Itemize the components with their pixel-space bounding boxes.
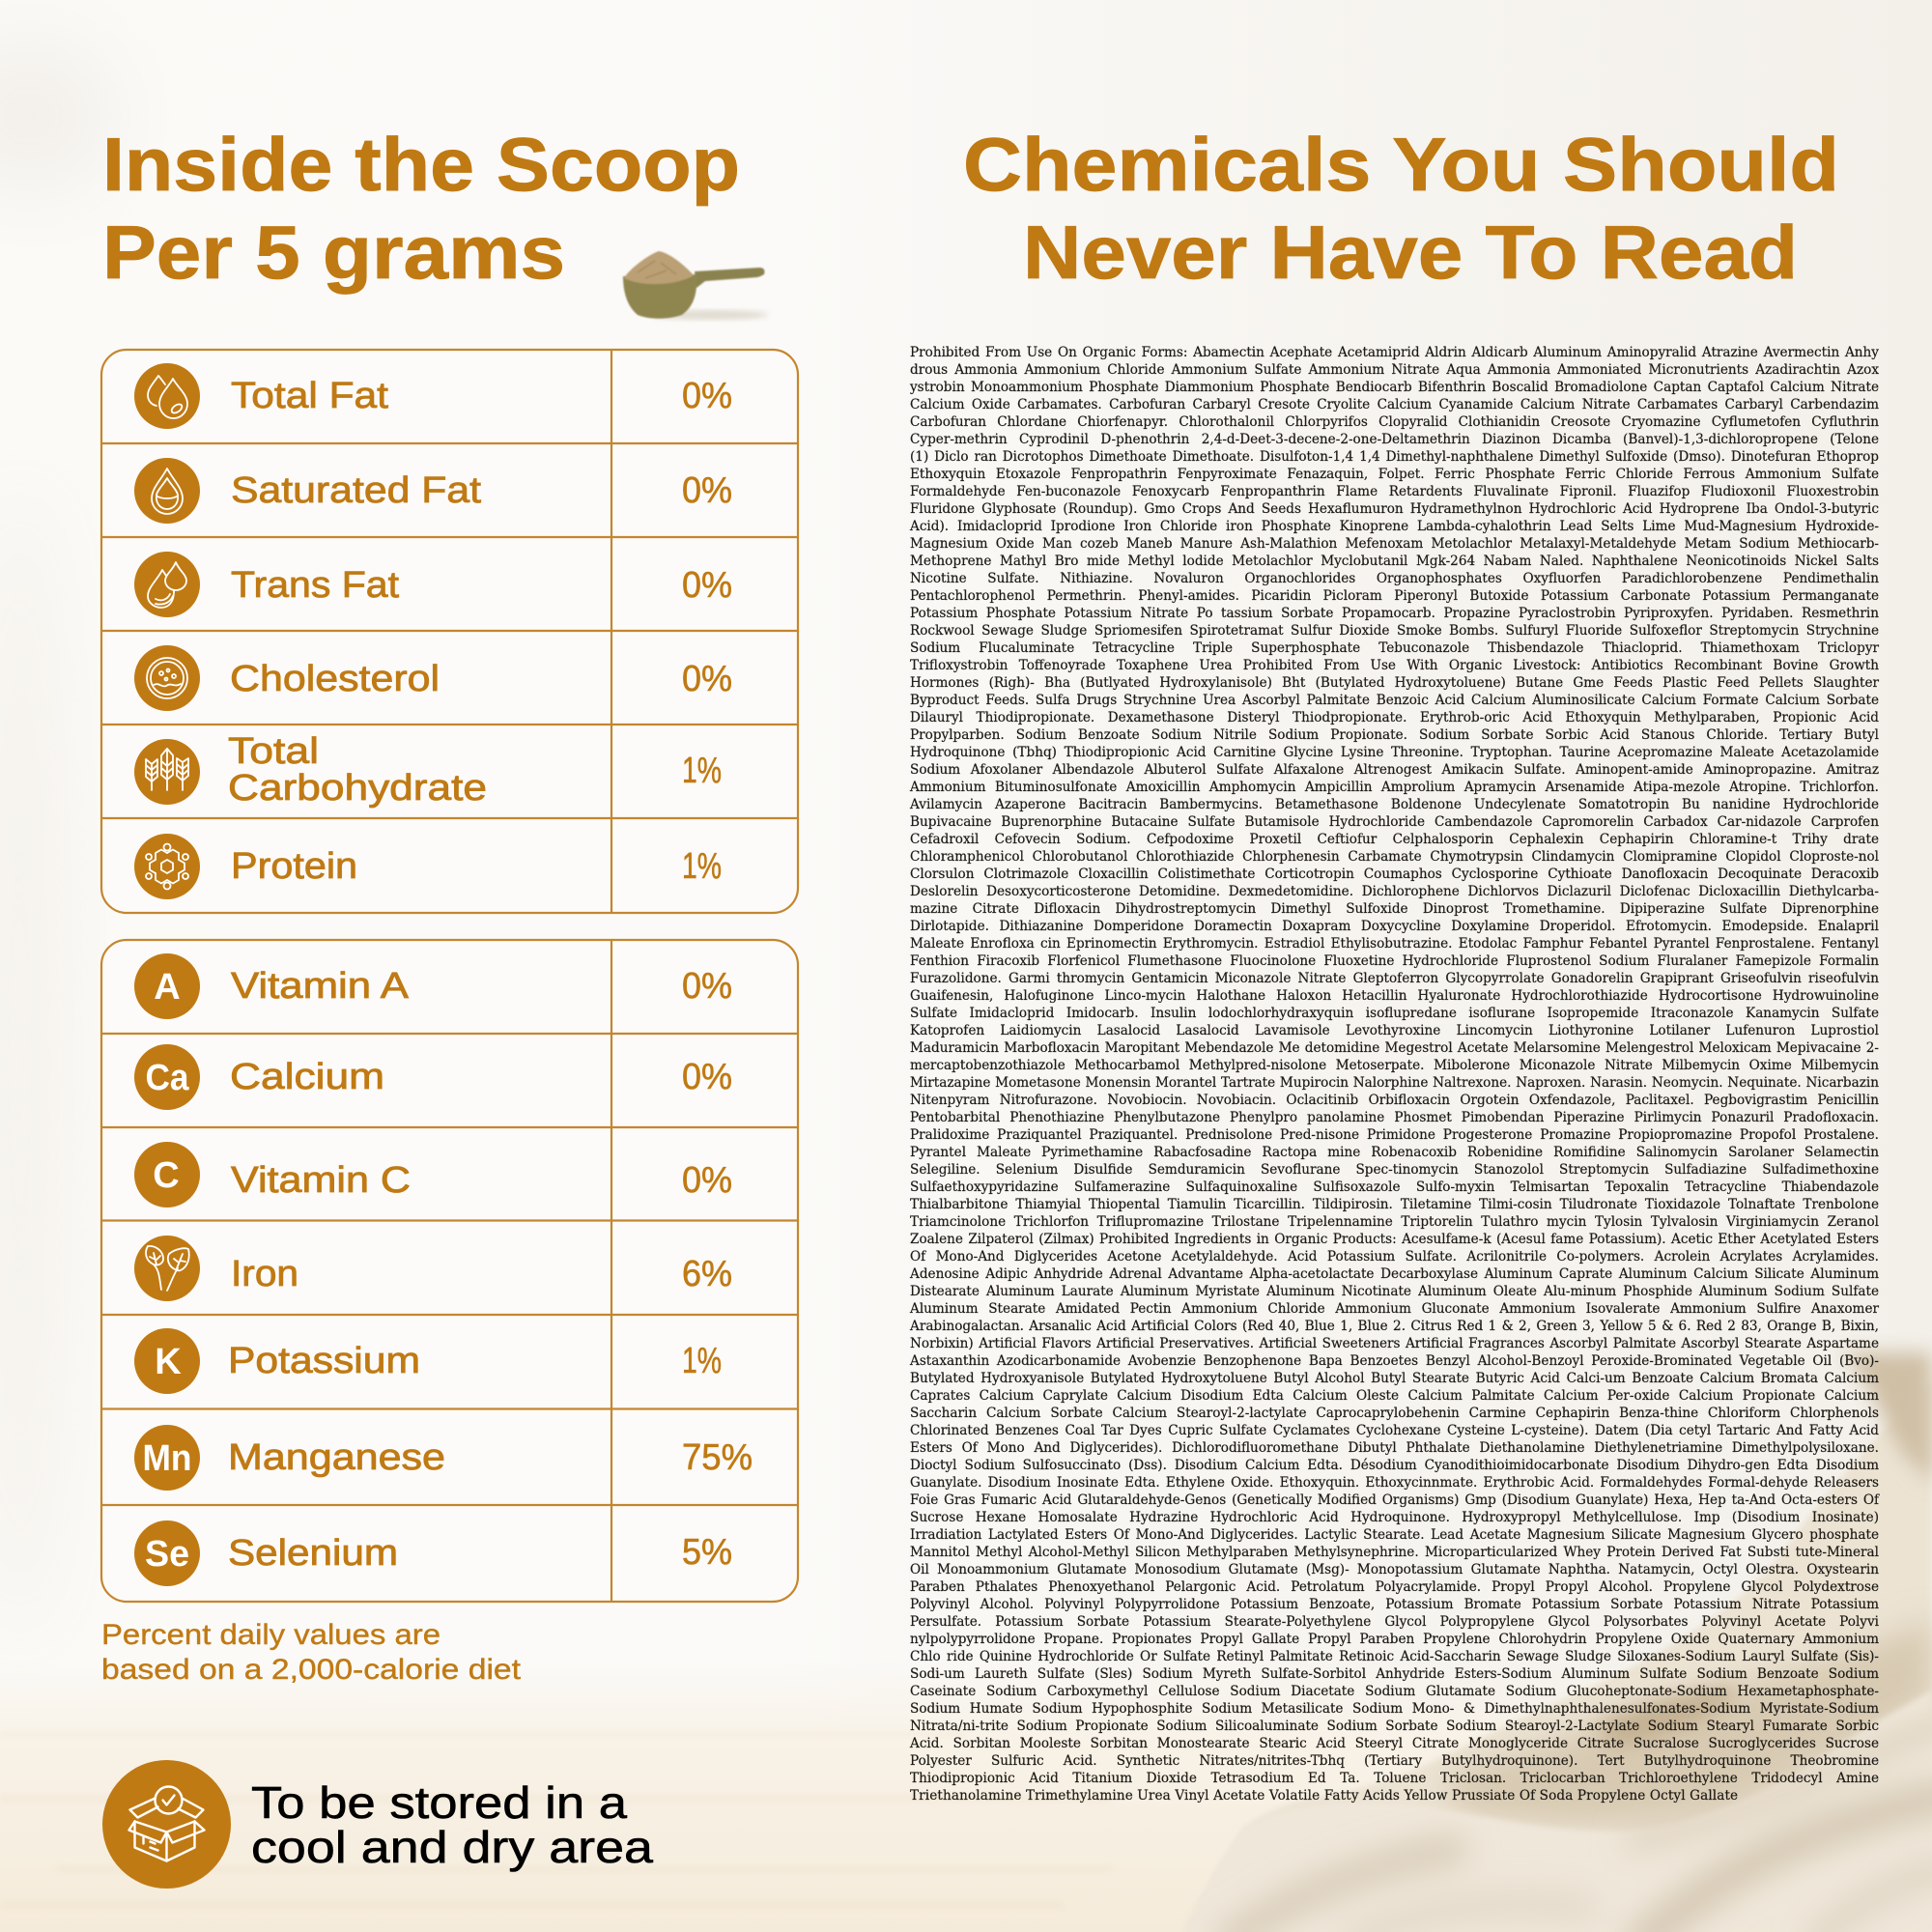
row: Saturated Fat: 0% (682, 470, 732, 511)
text block: prohibited chemicals list: Caseinate Sodium Carboxymethyl Cellulose Sodium Diacetate Sodium Glutamate Sodium Glucoheptonate-Sodium Hexametaphosphate- (910, 1684, 1879, 1699)
text block: prohibited chemicals list: Guaifenesin, Halofuginone Linco-mycin Halothane Haloxon Hetacillin Hyaluronate Hydrochlorothiazide Hydrocortisone Hydrowuinoline (910, 988, 1879, 1004)
heading: Inside the Scoop: Per 5 grams (102, 210, 565, 295)
text block: prohibited chemicals list: Maleate Enrofloxa cin Eprinomectin Erythromycin. Estradiol Ethylisobutrazine. Etodolac Famphur Febantel Pyrantel Fenprostalene. Fentanyl (910, 936, 1879, 952)
text block: prohibited chemicals list: Mirtazapine Mometasone Monensin Morantel Tartrate Mupirocin Nalorphine Naltrexone. Naproxen. Narasin. Neomycin. Nequinate. Nicarbazin (910, 1075, 1879, 1091)
text block: prohibited chemicals list: Formaldehyde Fen-buconazole Fenoxycarb Fenpropanthrin Flame Retardents Fluvalinate Fipronil. Fluazifop Fludioxonil Fluoxestrobin (910, 484, 1879, 499)
row: Potassium: K (155, 1342, 182, 1382)
row: Total Fat: 0% (682, 376, 732, 416)
text block: prohibited chemicals list: mercaptobenzothiazole Methocarbamol Methylpred-nisolone Metoserpate. Mibolerone Miconazole Nitrate Milbemycin Oxime Milbemycin (910, 1058, 1879, 1073)
row: Calcium: Calcium (230, 1057, 384, 1097)
panel: vitamins and minerals table (101, 940, 798, 1602)
text block: prohibited chemicals list: Hormones (Righ)- Bha (Butlyated Hydroxylanisole) Bht (Butylated Hydroxytoluene) Butane Gme Feeds Plastic Feed Pellets Slaughter (910, 675, 1879, 691)
row: Potassium: Potassium (228, 1341, 420, 1381)
text block: prohibited chemicals list: Deslorelin Desoxycorticosterone Detomidine. Dexmedetomidine. Dichlorophene Dichlorvos Diclazuril Diclofenac Dicloxacillin Diethylcarba- (910, 884, 1879, 899)
text block: prohibited chemicals list: Chlorinated Benzenes Coal Tar Dyes Cupric Sulfate Cyclamates Cyclohexane Cysteine L-cysteine). Datem (Dia cetyl Tartaric And Fatty Acid (910, 1423, 1879, 1438)
row: Total Fat: Total Fat (231, 376, 388, 416)
text block: prohibited chemicals list: Caprates Calcium Caprylate Calcium Disodium Edta Calcium Oleste Calcium Palmitate Calcium Per-oxide Calcium Propionate Calcium (910, 1388, 1879, 1404)
text block: prohibited chemicals list: Saccharin Calcium Sorbate Calcium Stearoyl-2-lactylate Caprocaprylobehenin Carmine Cephapirin Benza-thine Chloriform Chlorphenols (910, 1406, 1879, 1421)
text block: prohibited chemicals list: nylpolypyrrolidone Propane. Propionates Propyl Gallate Propyl Paraben Propylene Chlorohydrin Propylene Oxide Quaternary Ammonium (910, 1632, 1879, 1647)
text block: prohibited chemicals list: Fenthion Firacoxib Florfenicol Flumethasone Fluocinolone Fluoxetine Hydrochloride Fluprostenol Sodium Fluralaner Famepizole Formalin (910, 953, 1879, 969)
text block: prohibited chemicals list: Ethoxyquin Etoxazole Fenpropathrin Fenpyroximate Fenazaquin, Folpet. Ferric Phosphate Ferric Chloride Ferrous Ammonium Sulfate (910, 467, 1879, 482)
text block: prohibited chemicals list: Byproduct Feeds. Sulfa Drugs Strychnine Urea Ascorbyl Palmitate Benzoic Acid Calcium Aluminosilicate Calcium Formate Calcium Sorbate (910, 693, 1879, 708)
text block: prohibited chemicals list: Rockwool Sewage Sludge Spriomesifen Spirotetramat Sulfur Dioxide Smoke Bombs. Sulfuryl Fluoride Sulfoxeflor Streptomycin Strychnine (910, 623, 1879, 639)
text block: prohibited chemicals list: Butylated Hydroxyanisole Butylated Hydroxytoluene Butyl Alcohol Butyl Stearate Butyric Acid Calci-um Benzoate Calcium Bromata Calcium (910, 1371, 1879, 1386)
text block: prohibited chemicals list: Sodium Afoxolaner Albendazole Albuterol Sulfate Alfaxalone Altrenogest Amikacin Sulfate. Aminopent-amide Aminopropazine. Amitraz (910, 762, 1879, 778)
heading: Chemicals You Should Never Have To Read (963, 122, 1839, 295)
blanket: lobe, folds and lower hump (1183, 1352, 1932, 1932)
row: Protein (134, 834, 722, 899)
row: Vitamin A: A (154, 967, 181, 1008)
text block: prohibited chemicals list: Selegiline. Selenium Disulfide Semduramicin Sevoflurane Spec-tinomycin Stanozolol Streptomycin Sulfadiazine Sulfadimethoxine (910, 1162, 1879, 1178)
row: Manganese: 75% (682, 1437, 753, 1478)
row: Iron: 6% (682, 1254, 732, 1294)
text block: prohibited chemicals list: Irradiation Lactylated Esters Of Mono-And Diglycerides. Lactylic Stearate. Lead Acetate Magnesium Silicate Magnesium Glycero phosphate (910, 1527, 1879, 1543)
text block: prohibited chemicals list: Sucrose Hexane Homosalate Hydrazine Hydrochloric Acid Hydroquinone. Hydroxypropyl Methylcellulose. Imp (Disodium Inosinate) (910, 1510, 1879, 1525)
row: Calcium: Ca (145, 1058, 189, 1098)
panel: macronutrient table (101, 350, 798, 913)
row: Saturated Fat (134, 458, 732, 524)
text block: prohibited chemicals list: Nicotine Sulfate. Nithiazine. Novaluron Organochlorides Organophosphates Oxyfluorfen Paradichlorobenzene Pendimethalin (910, 571, 1879, 586)
text block: prohibited chemicals list: Nitrata/ni-trite Sodium Propionate Sodium Silicoaluminate Sodium Sorbate Sodium Stearoyl-2-Lactylate Sodium Stearyl Fumarate Sorbic (910, 1719, 1879, 1734)
heading: Inside the Scoop (102, 122, 740, 295)
text block: prohibited chemicals list: drous Ammonia Ammonium Chloride Ammonium Sulfate Ammonium Nitrate Aqua Ammonia Ammoniated Micronutrients Azadirachtin Azox (910, 362, 1879, 378)
row: Vitamin C (134, 1142, 732, 1208)
text block: prohibited chemicals list: Maduramicin Marbofloxacin Maropitant Mebendazole Me detomidine Megestrol Acetate Melarsomine Melengestrol Meloxicam Mepivacaine 2- (910, 1040, 1879, 1056)
text: storage instruction: To be stored in a (251, 1777, 627, 1828)
text block: prohibited chemicals list: Furazolidone. Garmi thromycin Gentamicin Miconazole Nitrate Gleptoferron Glycopyrrolate Gonadorelin Grapiprant Griseofulvin riseofulvin (910, 971, 1879, 986)
text block: prohibited chemicals list: Acid). Imidacloprid Iprodione Iron Chloride iron Phosphate Kinoprene Lambda-cyhalothrin Lead Selts Lime Mud-Magnesium Hydroxide- (910, 519, 1879, 534)
row: Total Carbohydrate: 1% (682, 751, 722, 791)
text block: prohibited chemicals list: Propylparben. Sodium Benzoate Sodium Nitrile Sodium Propionate. Sodium Sorbate Sorbic Acid Stanous Chloride. Tertiary Butyl (910, 727, 1879, 743)
row: Calcium: 0% (682, 1057, 732, 1097)
row: Protein: Protein (231, 846, 357, 887)
text block: prohibited chemicals list: Zoalene Zilpaterol (Zilmax) Prohibited Ingredients in Organic Products: Acesulfame-k (Acesul fame Potassium). Acetic Ether Acetylated Esters (910, 1232, 1879, 1247)
text block: prohibited chemicals list: Oil Monoammonium Glutamate Monosodium Glutamate (Msg)- Monopotassium Glutamate Naphtha. Natamycin, Octyl Olestra. Oxystearin (910, 1562, 1879, 1577)
text block: prohibited chemicals list: Bupivacaine Buprenorphine Butacaine Sulfate Butamisole Hydrochloride Cambendazole Capromorelin Carbadox Car-nidazole Carprofen (910, 814, 1879, 830)
text block: prohibited chemicals list: Paraben Pthalates Phenoxyethanol Pelargonic Acid. Petrolatum Polyacrylamide. Propyl Propyl Alcohol. Propylene Glycol Polydextrose (910, 1579, 1879, 1595)
text block: prohibited chemicals list: Trifloxystrobin Toffenoyrade Toxaphene Urea Prohibited From Use With Organic Livestock: Antibiotics Recombinant Bovine Growth (910, 658, 1879, 673)
text block: prohibited chemicals list: Triamcinolone Trichlorfon Triflupromazine Trilostane Tripelennamine Triptorelin Tulathro mycin Tylosin Tylvalosin Virginiamycin Zeranol (910, 1214, 1879, 1230)
heading: Chemicals You Should Never Have To Read: Chemicals You Should (963, 122, 1839, 207)
text block: prohibited chemicals list: Guanylate. Disodium Inosinate Edta. Ethylene Oxide. Ethoxyquin. Ethoxycinnmate. Erythrobic Acid. Formaldehydes Formal-dehyde Releasers (910, 1475, 1879, 1491)
footnote: percent daily values: Percent daily values are (101, 1619, 440, 1651)
text block: prohibited chemicals list (910, 345, 1880, 1804)
row: Manganese (134, 1425, 753, 1491)
text block: prohibited chemicals list: Triethanolamine Trimethylamine Urea Vinyl Acetate Volatile Fatty Acids Yellow Prussiate Of Soda Propylene Octyl Gallate (910, 1788, 1738, 1804)
text block: prohibited chemicals list: Sulfate Imidacloprid Imidocarb. Insulin lodochlorhydraxyquin isoflupredane isoflurane Isopropemide Itraconazole Kanamycin Sulfate (910, 1006, 1879, 1021)
text: storage instruction: cool and dry area (251, 1822, 653, 1872)
row: Selenium (134, 1520, 732, 1586)
row: Manganese: Mn (143, 1438, 191, 1479)
text block: prohibited chemicals list: Cyper-methrin Cyprodinil D-phenothrin 2,4-d-Deet-3-decene-2-one-Deltamethrin Diazinon Dicamba (Banvel)-1,3-dichloropropene (Telone (910, 432, 1879, 447)
text block: prohibited chemicals list: Ammonium Bituminosulfonate Amoxicillin Amphomycin Ampicillin Amprolium Apramycin Arsenamide Atipa-mezole Atropine. Trichlorfon. (910, 780, 1879, 795)
row: Manganese: Manganese (228, 1437, 445, 1478)
text block: prohibited chemicals list: Cefadroxil Cefovecin Sodium. Cefpodoxime Proxetil Ceftiofur Celphalosporin Cephalexin Cephapirin Chloramine-t Trihy drate (910, 832, 1879, 847)
row: Trans Fat: 0% (682, 565, 732, 606)
text block: prohibited chemicals list: Sulfaethoxypyridazine Sulfamerazine Sulfaquinoxaline Sulfisoxazole Sulfo-myxin Telmisartan Tepoxalin Tetracycline Thiabendazole (910, 1179, 1879, 1195)
text block: prohibited chemicals list: Calcium Oxide Carbamates. Carbofuran Carbaryl Cresote Cryolite Calcium Cyanamide Calcium Nitrate Carbamates Carbaryl Carbendazim (910, 397, 1879, 412)
text block: prohibited chemicals list: Dirlotapide. Dithiazanine Domperidone Doramectin Doxapram Doxycycline Doxylamine Droperidol. Efrotomycin. Emodepside. Enalapril (910, 919, 1879, 934)
text block: prohibited chemicals list: Chloramphenicol Chlorobutanol Chlorothiazide Chlorphenesin Carbamate Chymotrypsin Clindamycin Clomipramine Clopidol Cloproste-nol (910, 849, 1879, 865)
text block: prohibited chemicals list: Clorsulon Clotrimazole Cloxacillin Colistimethate Corticotropin Coumaphos Cyclosporine Cythioate Danofloxacin Decoquinate Deracoxib (910, 867, 1879, 882)
text block: prohibited chemicals list: Thiodipropionic Acid Titanium Dioxide Tetrasodium Ed Ta. Toluene Triclosan. Triclocarban Trichloroethylene Tridodecyl Amine (910, 1771, 1879, 1786)
text block: prohibited chemicals list: Sodi-um Laureth Sulfate (Sles) Sodium Myreth Sulfate-Sorbitol Anhydride Esters-Sodium Aluminum Sulfate Sodium Benzoate Sodium (910, 1666, 1879, 1682)
row: Vitamin A: 0% (682, 966, 732, 1007)
text block: prohibited chemicals list: Katoprofen Laidiomycin Lasalocid Lasalocid Lavamisole Levothyroxine Lincomycin Liothyronine Lotilaner Lufenuron Luprostiol (910, 1023, 1879, 1038)
text block: prohibited chemicals list: Foie Gras Fumaric Acid Glutaraldehyde-Genos (Genetically Modified Organisms) Gmp (Disodium Guanylate) Hexa, Hep ta-And Octa-esters Of (910, 1492, 1879, 1508)
row: Vitamin C: 0% (682, 1160, 732, 1201)
text block: prohibited chemicals list: Polyester Sulfuric Acid. Synthetic Nitrates/nitrites-Tbhq (Tertiary Butylhydroquinone). Tert Butylhydroquinone Theobromine (910, 1753, 1879, 1769)
text block: prohibited chemicals list: Dioctyl Sodium Sulfosuccinato (Dss). Disodium Calcium Edta. Désodium Cyanodithioimidocarbonate Disodium Dihydro-gen Edta Disodium (910, 1458, 1879, 1473)
text block: prohibited chemicals list: Arabinogalactan. Arsanalic Acid Artificial Colors (Red 40, Blue 1, Blue 2. Citrus Red 1 & 2, Green 3, Yellow 5 & 6. Red 2 83, Orange B, Bixin, (910, 1319, 1879, 1334)
text block: prohibited chemicals list: Polyvinyl Alcohol. Polyvinyl Polypyrrolidone Potassium Benzoate, Potassium Bromate Potassium Sorbate Potassium Nitrate Potassium (910, 1597, 1879, 1612)
row: Total Carbohydrate: Carbohydrate (228, 768, 487, 809)
row: Total Carbohydrate (134, 731, 722, 809)
row: Saturated Fat: Saturated Fat (231, 470, 481, 511)
text block: prohibited chemicals list: Magnesium Oxide Man cozeb Maneb Manure Ash-Malathion Mefenoxam Metolachlor Metalaxyl-Metaldehyde Metam Sodium Methiocarb- (910, 536, 1879, 552)
row: Cholesterol (134, 645, 732, 711)
row: Trans Fat: Trans Fat (231, 565, 399, 606)
row: Iron (134, 1236, 732, 1301)
text block: prohibited chemicals list: Hydroquinone (Tbhq) Thiodipropionic Acid Carnitine Glycine Lysine Threonine. Tryptophan. Taurine Acepromazine Maleate Acetazolamide (910, 745, 1879, 760)
text block: prohibited chemicals list: Fluridone Glyphosate (Roundup). Gmo Crops And Seeds Hexaflumuron Hydramethylnon Hydrochloric Acid Hydroprene Iba Ondol-3-butyric (910, 501, 1879, 517)
text block: prohibited chemicals list: Aluminum Stearate Amidated Pectin Ammonium Chloride Ammonium Gluconate Ammonium Isovalerate Ammonium Sulfire Anaxomer (910, 1301, 1879, 1317)
text block: prohibited chemicals list: Pyrantel Maleate Pyrimethamine Rabacfosadine Ractopa mine Robenacoxib Robenidine Romifidine Salinomycin Sarolaner Selamectin (910, 1145, 1879, 1160)
row: Vitamin A (134, 953, 732, 1019)
text block: prohibited chemicals list: Sodium Flucaluminate Tetracycline Triple Superphosphate Tebuconazole Thisbendazole Thiacloprid. Thiamethoxam Triclopyr (910, 640, 1879, 656)
text block: prohibited chemicals list: Astaxanthin Azodicarbonamide Avobenzie Benzophenone Bapa Benzoetes Benzyl Alcohol-Benzoyl Peroxide-Brominated Vegetable Oil (Bvo)- (910, 1353, 1879, 1369)
text block: prohibited chemicals list: Dilauryl Thiodipropionate. Dexamethasone Disteryl Thiodpropionate. Erythrob-oric Acid Ethoxyquin Methylparaben, Propionic Acid (910, 710, 1879, 725)
text block: prohibited chemicals list: Carbofuran Chlordane Chiorfenapyr. Chlorothalonil Chlorpyrifos Clopyralid Clothianidin Creosote Cryomazine Cyflumetofen Cyfluthrin (910, 414, 1879, 430)
row: Calcium (134, 1044, 732, 1110)
icon: open storage box (102, 1760, 231, 1889)
heading: Chemicals You Should Never Have To Read: Never Have To Read (1023, 210, 1798, 295)
row: Selenium: Selenium (228, 1533, 398, 1574)
text block: prohibited chemicals list: Of Mono-And Diglycerides Acetone Acetylaldehyde. Acid Potassium Sulfate. Acrilonitrile Co-polymers. Acrolein Acrylates Acrylamides. (910, 1249, 1879, 1264)
row: Vitamin C: C (153, 1155, 180, 1196)
text block: prohibited chemicals list: Avilamycin Azaperone Bacitracin Bambermycins. Betamethasone Boldenone Undecylenate Somatotropin Bu nanidine Hydrochloride (910, 797, 1879, 812)
text block: prohibited chemicals list: Sodium Humate Sodium Hypophosphite Sodium Metasilicate Sodium Mono- & Dimethylnaphthalenesulfonates-Sodium Myristate-Sodium (910, 1701, 1879, 1717)
icon: scoop of powder (623, 251, 768, 320)
text block: prohibited chemicals list: Prohibited From Use On Organic Forms: Abamectin Acephate Acetamiprid Aldrin Aldicarb Aluminum Aminopyralid Atrazine Avermectin Anhy (910, 345, 1879, 360)
text block: prohibited chemicals list: Methoprene Mathyl Bro mide Methyl lodide Metolachlor Myclobutanil Mgk-264 Nabam Naled. Naphthalene Neonicotinoids Nickel Salts (910, 554, 1879, 569)
text block: prohibited chemicals list: Mannitol Methyl Alcohol-Methyl Silicon Methylparaben Methylsynephrine. Microparticularized Whey Protein Derived Fat Substi tute-Mineral (910, 1545, 1879, 1560)
text block: prohibited chemicals list: Pentachlorophenol Permethrin. Phenyl-amides. Picaridin Picloram Piperonyl Butoxide Potassium Carbonate Potassium Permanganate (910, 588, 1879, 604)
text block: prohibited chemicals list: (1) Diclo ran Dicrotophos Dimethoate Dimethoate. Disulfoton-1,4 1,4 Dimethyl-naphthalene Dimethyl Sulfoxide (Dmso). Dinotefuran Ethoprop (910, 449, 1879, 465)
row: Cholesterol: 0% (682, 659, 732, 699)
text block: prohibited chemicals list: Thialbarbitone Thiamyial Thiopental Tiamulin Ticarcillin. Tildipirosin. Tiletamine Tilmi-cosin Tiludronate Tioxidazole Tolnaftate Trenbolone (910, 1197, 1879, 1212)
row: Protein: 1% (682, 846, 722, 887)
row: Vitamin A: Vitamin A (231, 966, 410, 1007)
text block: prohibited chemicals list: ystrobin Monoammonium Phosphate Diammonium Phosphate Bendiocarb Bifenthrin Boscalid Bromadiolone Captan Captafol Calcium Nitrate (910, 380, 1879, 395)
text block: prohibited chemicals list: Distearate Aluminum Laurate Aluminum Myristate Aluminum Nicotinate Aluminum Oleate Alu-minum Phosphide Aluminum Sodium Sulfate (910, 1284, 1879, 1299)
row: Selenium: 5% (682, 1532, 732, 1573)
row: Vitamin C: Vitamin C (231, 1160, 411, 1201)
text block: prohibited chemicals list: Acid. Sorbitan Mooleste Sorbitan Monostearate Stearic Acid Steeryl Citrate Monoglyceride Citrate Sucralose Sucroglycerides Sucrose (910, 1736, 1879, 1751)
text block: prohibited chemicals list: Pentobarbital Phenothiazine Phenylbutazone Phenylpro panolamine Phosmet Pimobendan Piperazine Pirlimycin Ponazuril Pradofloxacin. (910, 1110, 1879, 1125)
row: Trans Fat (134, 552, 732, 617)
row: Selenium: Se (145, 1534, 189, 1575)
text block: prohibited chemicals list: Adenosine Adipic Anhydride Adrenal Advantame Alpha-acetolactate Decarboxylase Aluminum Caprate Aluminum Calcium Silicate Aluminum (910, 1266, 1879, 1282)
text block: prohibited chemicals list: Potassium Phosphate Potassium Nitrate Po tassium Sorbate Propamocarb. Propazine Pyraclostrobin Pyriproxyfen. Pyridaben. Resmethrin (910, 606, 1879, 621)
text block: prohibited chemicals list: Pralidoxime Praziquantel Praziquantel. Prednisolone Pred-nisone Primidone Progesterone Promazine Propiopromazine Propofol Prostalene. (910, 1127, 1879, 1143)
text: storage instruction (251, 1777, 653, 1872)
text block: prohibited chemicals list: mazine Citrate Difloxacin Dihydrostreptomycin Dimethyl Sulfoxide Dinoprost Tromethamine. Dipiperazine Sulfate Diprenorphine (910, 901, 1879, 917)
row: Cholesterol: Cholesterol (230, 659, 440, 699)
text block: prohibited chemicals list: Chlo ride Quinine Hydrochloride Or Sulfate Retinyl Palmitate Retinoic Acid-Saccharin Sewage Sludge Siloxanes-Sodium Lauryl Sulfate (Sis)- (910, 1649, 1879, 1664)
footnote: percent daily values (101, 1619, 522, 1686)
row: Potassium (134, 1328, 722, 1394)
row: Potassium: 1% (682, 1341, 722, 1381)
row: Iron: Iron (231, 1254, 298, 1294)
footnote: percent daily values: based on a 2,000-calorie diet (101, 1654, 522, 1686)
text block: prohibited chemicals list: Esters Of Mono And Diglycerides). Dichlorodifluoromethane Dibutyl Phthalate Diethanolamine Diethylenetriamine Dimethylpolysiloxane. (910, 1440, 1879, 1456)
text block: prohibited chemicals list: Norbixin) Artificial Flavors Artificial Preservatives. Artificial Sweeteners Artificial Fragrances Ascorbyl Palmitate Ascorbyl Stearate Aspartame (910, 1336, 1879, 1351)
heading: Inside the Scoop: Inside the Scoop (102, 122, 740, 207)
row: Total Fat (134, 363, 732, 429)
text block: prohibited chemicals list: Persulfate. Potassium Sorbate Potassium Stearate-Polyethylene Glycol Polypropylene Glycol Polysorbates Polyvinyl Acetate Polyvi (910, 1614, 1879, 1630)
text block: prohibited chemicals list: Nitenpyram Nitrofurazone. Novobiocin. Novobiacin. Oclacitinib Orbifloxacin Orgotein Oxfendazole, Paclitaxel. Pegbovigrastim Penicillin (910, 1093, 1879, 1108)
row: Total Carbohydrate: Total (228, 731, 319, 772)
